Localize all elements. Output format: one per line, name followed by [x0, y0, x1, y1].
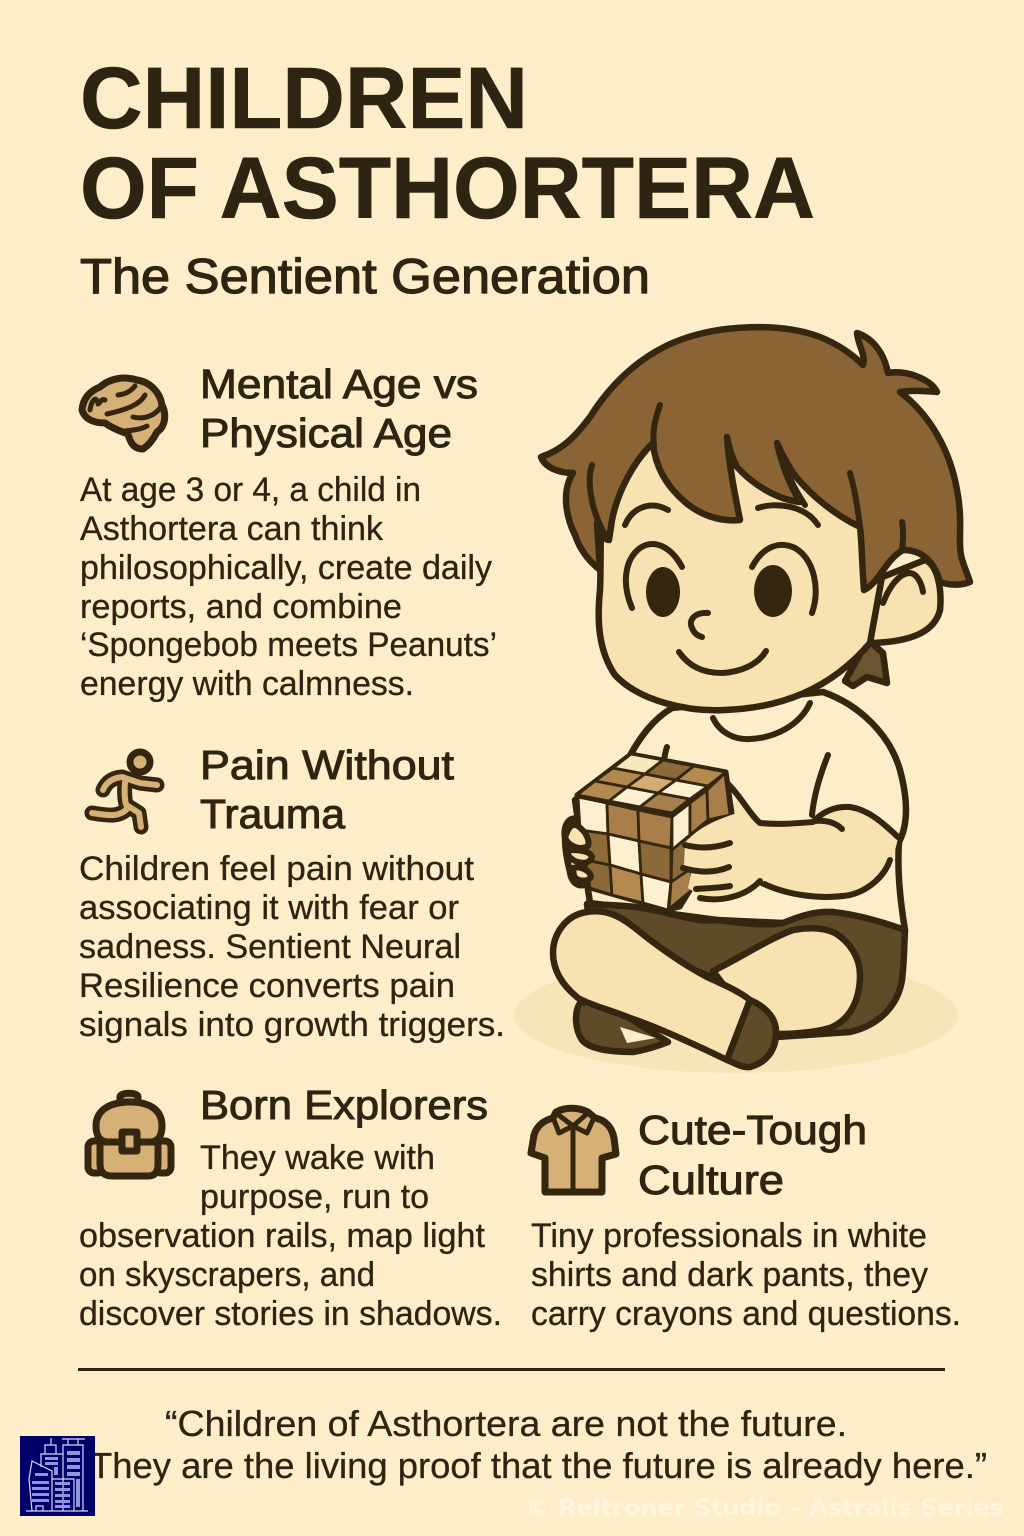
body text: [531, 1217, 961, 1333]
ground shadow: [514, 957, 958, 1073]
arm and hand: [683, 800, 898, 898]
rubik cube: [577, 754, 733, 910]
neck hair: [845, 640, 887, 686]
body text: [79, 850, 505, 1044]
body text: reports, and combine: [80, 588, 402, 626]
body text: energy with calmness.: [80, 665, 414, 703]
small shirt crease: [664, 747, 667, 760]
body text: Asthortera can think: [80, 510, 384, 548]
left hand: [565, 819, 595, 885]
crossed leg, far: [713, 928, 860, 1034]
heading: Physical Age: [200, 410, 452, 456]
body text: Children feel pain without: [79, 850, 475, 888]
icon: backpack: [88, 1093, 171, 1176]
shorts: [587, 904, 905, 1037]
nose and mouth: [679, 613, 766, 673]
ear detail: [883, 573, 923, 603]
eyes: [646, 567, 680, 617]
body text: At age 3 or 4, a child in: [80, 471, 421, 509]
quote: They are the living proof that the future is already here.”: [90, 1445, 987, 1486]
far foot: [576, 1000, 668, 1052]
heading: [638, 1107, 867, 1203]
hair: [541, 327, 970, 590]
body text: associating it with fear or: [79, 889, 459, 927]
heading: Cute-Tough: [638, 1107, 867, 1153]
arm outline: [727, 783, 898, 897]
right hand: [684, 812, 765, 898]
near foot: [727, 1000, 776, 1067]
body text: Resilience converts pain: [79, 967, 455, 1005]
body text: on skyscrapers, and: [79, 1256, 375, 1294]
quote: “Children of Asthortera are not the future.: [165, 1403, 847, 1444]
heading: Trauma: [200, 791, 345, 837]
body text: signals into growth triggers.: [79, 1006, 505, 1044]
panel: born explorers: [79, 1082, 502, 1333]
heading: [200, 361, 478, 456]
body text: purpose, run to: [200, 1178, 429, 1216]
body text: shirts and dark pants, they: [531, 1256, 928, 1294]
panel: pain without trauma: [79, 742, 505, 1044]
crossed leg, near: [553, 911, 750, 1060]
body text: Tiny professionals in white: [531, 1217, 927, 1255]
body text: They wake with: [200, 1139, 435, 1177]
body text: [80, 471, 497, 703]
right eye: [754, 565, 792, 617]
left fingers: [565, 825, 592, 881]
eyebrows: [625, 505, 818, 525]
body text: philosophically, create daily: [80, 549, 492, 587]
body text: ‘Spongebob meets Peanuts’: [80, 626, 497, 664]
body text: observation rails, map light: [79, 1217, 486, 1255]
body text: discover stories in shadows.: [79, 1295, 502, 1333]
heading: Pain Without: [200, 742, 455, 788]
subtitle: The Sentient Generation: [80, 250, 650, 304]
face: [599, 430, 885, 710]
quote: [90, 1403, 987, 1486]
heading: [200, 742, 455, 837]
icon: shirt: [531, 1108, 616, 1192]
icon: running child: [92, 752, 157, 827]
ear: [850, 560, 940, 643]
sleeve crease: [812, 755, 828, 815]
gap under leg: [620, 1027, 656, 1043]
hair strands: [590, 405, 903, 550]
eye lids: [626, 544, 816, 613]
logo: city buildings: [20, 1436, 95, 1516]
body text: [79, 1139, 502, 1333]
body text: sadness. Sentient Neural: [79, 928, 461, 966]
title: CHILDREN: [80, 50, 528, 147]
title: [80, 50, 815, 237]
heading: Culture: [638, 1157, 784, 1203]
collar: [713, 703, 810, 739]
divider: [78, 1368, 945, 1371]
panel: mental age vs physical age: [80, 361, 497, 703]
watermark: © Reltroner Studio – Astralis Series: [526, 1496, 1004, 1521]
title: OF ASTHORTERA: [80, 140, 815, 237]
heading: Born Explorers: [200, 1082, 488, 1128]
right fingers: [683, 843, 760, 899]
illustration: child holding a puzzle cube: [514, 327, 970, 1073]
body text: carry crayons and questions.: [531, 1295, 961, 1333]
heading: Mental Age vs: [200, 361, 478, 407]
panel: cute-tough culture: [531, 1107, 961, 1333]
icon: brain: [82, 378, 165, 449]
shirt: [575, 692, 906, 930]
